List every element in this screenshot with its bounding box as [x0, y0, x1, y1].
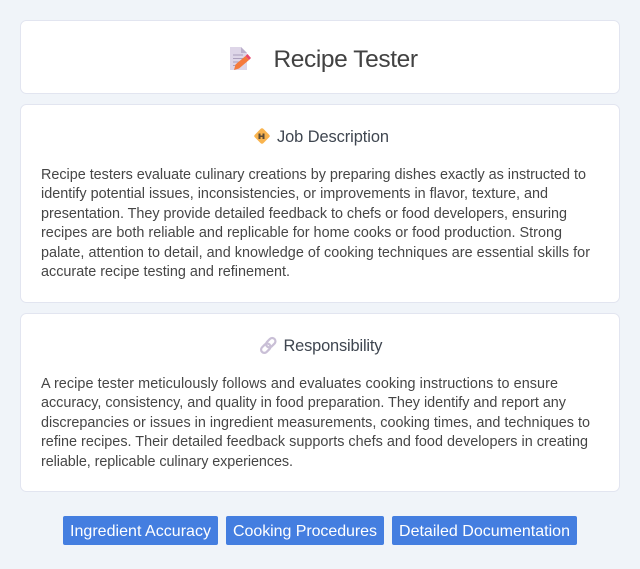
text: job description body: presentation. They provide detailed feedback to chefs or food developers, ensuring — [41, 206, 567, 222]
icon: document with pencil — [230, 47, 251, 70]
panel: title — [20, 20, 620, 94]
text: responsibility body: accuracy, consistency, and quality in food preparation. They identify and report any — [41, 395, 567, 411]
text: responsibility body: refine recipes. Their detailed feedback supports chefs and food developers in creating — [41, 434, 588, 450]
tag: ingredient accuracy — [63, 516, 218, 545]
text: responsibility body — [41, 376, 590, 470]
tag: ingredient accuracy: Ingredient Accuracy — [70, 523, 211, 540]
text: job description body: palate, attention to detail, and knowledge of cooking techniques are essential skills for — [41, 245, 590, 261]
heading: job description: Job Description — [277, 128, 389, 146]
tag: detailed documentation: Detailed Documentation — [399, 523, 570, 540]
text: job description body: identify potential issues, inconsistencies, or improvements in flavor, texture, and — [41, 186, 548, 202]
heading: responsibility: Responsibility — [284, 337, 383, 355]
icon: diamond sign — [254, 128, 270, 144]
tag: detailed documentation — [392, 516, 577, 545]
text: job description body — [41, 167, 590, 280]
tag: cooking procedures — [226, 516, 384, 545]
text: responsibility body: reliable, replicable culinary experiences. — [41, 454, 293, 470]
text: responsibility body: discrepancies or issues in ingredient measurements, cooking times, and techniques to — [41, 415, 590, 431]
title text: Recipe Tester — [274, 46, 418, 73]
text: responsibility body: A recipe tester meticulously follows and evaluates cooking instructions to ensure — [41, 376, 558, 392]
tag: cooking procedures: Cooking Procedures — [233, 523, 377, 540]
text: job description body: accurate recipe testing and refinement. — [41, 264, 290, 280]
panel: responsibility — [20, 314, 620, 492]
text: job description body: recipes are both reliable and replicable for home cooks or food production. Strong — [41, 225, 562, 241]
icon: chain link — [260, 337, 277, 354]
panel: job description — [20, 104, 620, 302]
text: job description body: Recipe testers evaluate culinary creations by preparing dishes exactly as instructed to — [41, 167, 586, 183]
